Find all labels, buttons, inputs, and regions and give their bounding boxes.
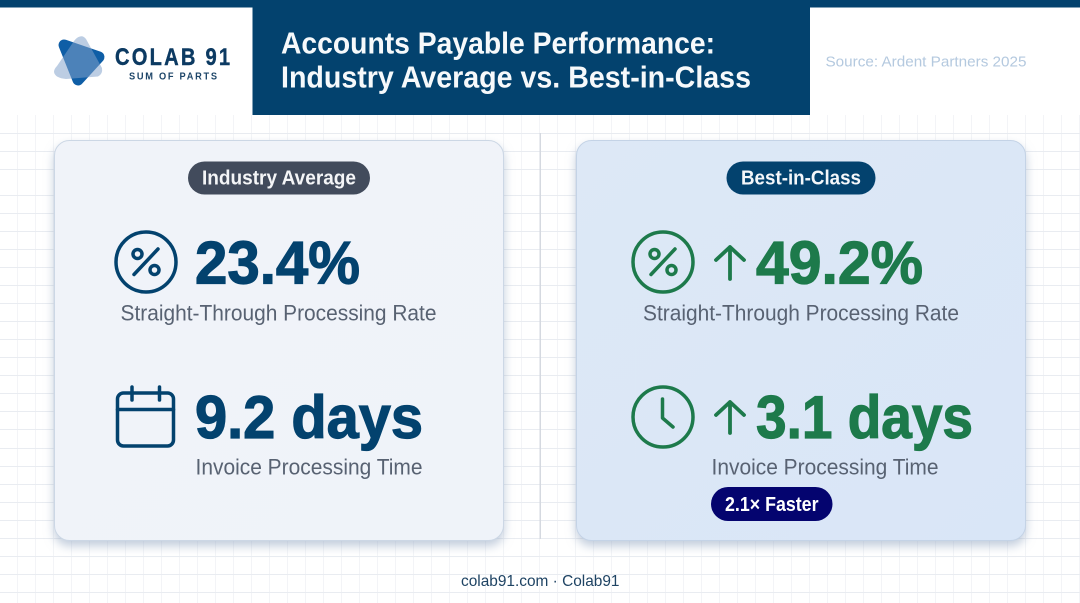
- value: 49.2%: 49.2%: [756, 230, 923, 296]
- title block: [252, 0, 810, 115]
- panel: best-in-class: [576, 140, 1026, 540]
- label: invoice time: Invoice Processing Time: [196, 454, 422, 480]
- label: straight-through: Straight-Through Processing Rate: [643, 300, 959, 326]
- icon: calendar: [118, 387, 174, 446]
- badge: industry average: [188, 162, 370, 194]
- icon: percent: [116, 232, 176, 292]
- top bar: [0, 0, 1080, 8]
- title line 1: Accounts Payable Performance:: [281, 26, 715, 60]
- title line 2: Industry Average vs. Best-in-Class: [281, 60, 751, 94]
- logo mark: [54, 36, 102, 80]
- badge: 2.1x faster: 2.1× Faster: [725, 494, 819, 516]
- arrow up: [716, 247, 744, 279]
- label: straight-through: Straight-Through Processing Rate: [120, 300, 436, 326]
- panel: industry average: [54, 140, 504, 540]
- icon: clock: [633, 387, 693, 447]
- badge: best-in-class: [726, 162, 876, 194]
- badge: 2.1x faster: [711, 487, 832, 521]
- value: 3.1 days: 3.1 days: [756, 384, 973, 451]
- logo: [54, 36, 230, 83]
- label: invoice time: Invoice Processing Time: [712, 454, 938, 480]
- logo tagline: SUM OF PARTS: [129, 71, 217, 83]
- badge: industry average: Industry Average: [202, 168, 356, 190]
- value: 9.2 days: 9.2 days: [195, 384, 423, 451]
- source: Source: Ardent Partners 2025: [826, 54, 1026, 70]
- logo wordmark: COLAB 91: [115, 43, 230, 70]
- divider: [540, 133, 541, 539]
- badge: best-in-class: Best-in-Class: [741, 168, 861, 190]
- footer: colab91.com · Colab91: [461, 573, 620, 590]
- icon: percent green: [633, 232, 693, 292]
- arrow up: [716, 402, 744, 433]
- value: 23.4%: 23.4%: [195, 230, 360, 296]
